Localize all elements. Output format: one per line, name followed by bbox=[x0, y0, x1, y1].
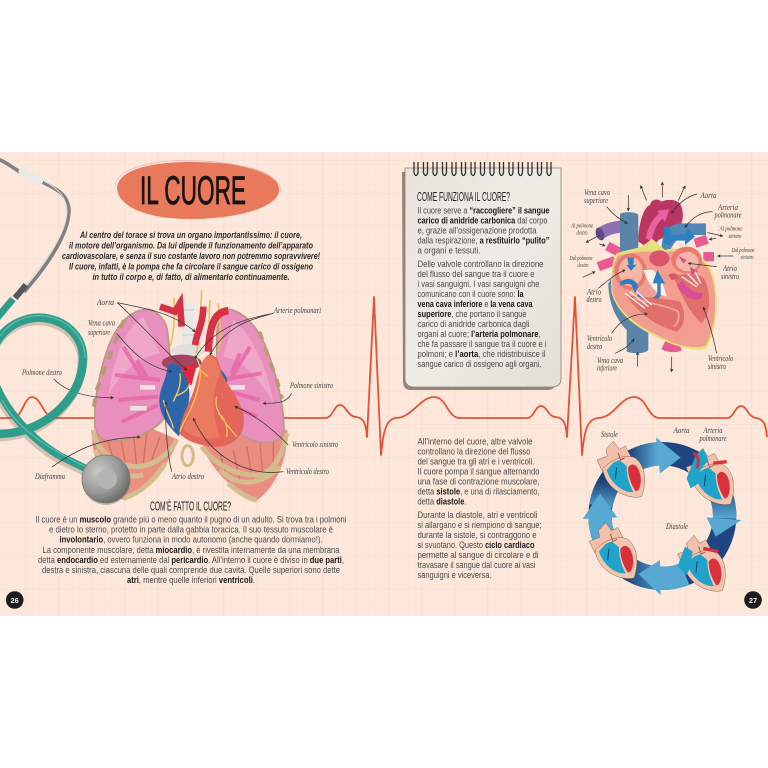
lung figure labels: superiore bbox=[88, 328, 110, 337]
heart cross-section labels bbox=[569, 188, 755, 372]
ring arc right bbox=[710, 476, 725, 518]
left lung bbox=[95, 309, 171, 441]
white connector bbox=[23, 172, 39, 180]
right diaphragm bbox=[202, 430, 287, 501]
body text left bbox=[36, 515, 346, 585]
heart cross-section labels: Dal polmone bbox=[569, 256, 593, 262]
notebook text: sangue carico di ossigeno agli organi. bbox=[418, 359, 542, 369]
intro text bbox=[62, 230, 320, 282]
pulmonary trunk bbox=[162, 355, 202, 371]
body text middle: durante la sistole, si contraggono e bbox=[418, 530, 536, 540]
left ventricle cavity bbox=[673, 274, 709, 323]
body text left: destra e sinistra, ciascuna delle quali comprende due cavità. Quelle superiori sono dette bbox=[42, 565, 340, 575]
mini heart top left bbox=[597, 441, 645, 497]
heart cross-section labels: Dal polmone bbox=[731, 248, 755, 254]
notebook text: organi al cuore; l’arteria polmonare, bbox=[418, 329, 540, 339]
chest piece bbox=[82, 455, 130, 505]
notebook text bbox=[418, 206, 550, 369]
lung figure labels: Ventricolo destro bbox=[286, 467, 329, 476]
center white and blue arrow bbox=[643, 270, 667, 297]
heart cross-section labels: sinistro bbox=[728, 234, 742, 240]
pulmonary artery blue bbox=[662, 223, 706, 253]
right valve cords bbox=[625, 292, 652, 308]
heart cross-section labels: sinistro bbox=[708, 362, 726, 371]
body text middle: detta diastole. bbox=[418, 496, 466, 506]
heart cross-section labels: inferiore bbox=[597, 364, 617, 372]
heart cross-section labels: Vena cava bbox=[584, 188, 610, 197]
notebook text: a organi e tessuti. bbox=[418, 246, 480, 256]
leaders bbox=[117, 303, 195, 332]
body text middle bbox=[418, 436, 542, 580]
page number 26 bbox=[6, 591, 24, 609]
notebook text: Il cuore serve a “raccogliere” il sangue bbox=[418, 206, 550, 216]
aortic root bbox=[182, 365, 197, 385]
page number 27: 27 bbox=[749, 596, 757, 605]
body text middle: detta sistole, e una di rilasciamento, bbox=[418, 486, 540, 496]
yellow fat layer bbox=[611, 238, 717, 350]
body text middle: travasare il sangue dal cuore ai vasi bbox=[418, 560, 536, 570]
mini heart bottom left bbox=[589, 523, 637, 579]
aorta arrow bbox=[646, 209, 669, 242]
right lung bbox=[217, 309, 284, 443]
body text middle: controllano la direzione del flusso bbox=[418, 446, 530, 456]
ring arc top bbox=[611, 454, 660, 480]
heart cross-section labels: Ventricolo bbox=[708, 354, 733, 363]
pulmonary arrow bbox=[663, 227, 695, 245]
heart cross-section labels: destro bbox=[578, 263, 588, 269]
notebook text: polmoni; e l’aorta, che ridistribuisce il bbox=[418, 349, 546, 359]
heart cross-section labels: Aorta bbox=[700, 191, 716, 200]
left atrium pink arrows bbox=[678, 256, 698, 275]
body text middle: Il cuore pompa il sangue alternando bbox=[418, 466, 540, 476]
green tubing to chest piece bbox=[0, 380, 97, 474]
body text middle: del sangue tra gli atri e i ventricoli. bbox=[418, 456, 534, 466]
pink pulmonary veins bbox=[598, 239, 714, 348]
cycle labels: Diastole bbox=[665, 522, 688, 531]
spiral rings bbox=[414, 162, 551, 176]
trachea bbox=[170, 303, 206, 353]
sternum tip bbox=[182, 446, 193, 466]
notebook shadow bbox=[402, 172, 556, 390]
right heart blue bbox=[159, 364, 189, 437]
notebook text: Delle valvole controllano la direzione bbox=[418, 259, 544, 269]
notebook text: dalla respirazione, a restituirlo “pulito” bbox=[418, 236, 550, 246]
lung figure labels: Polmone destro bbox=[21, 368, 62, 377]
bronchi left bbox=[115, 347, 160, 422]
notebook text: che fa passare il sangue tra il cuore e i bbox=[418, 339, 546, 349]
notebook text: carico di anidride carbonica dagli bbox=[418, 319, 530, 329]
green tubing loop bbox=[0, 318, 83, 434]
body text left: detta endocardio ed esternamente dal pericardio. All’interno il cuore è diviso in due parti, bbox=[38, 555, 344, 565]
flow arrows bbox=[627, 195, 629, 211]
lung white vessels bbox=[130, 387, 245, 408]
aortic valve bbox=[649, 250, 669, 266]
lung figure labels: Arterie polmonari bbox=[273, 306, 321, 315]
heart cross-section labels: Ventricolo bbox=[587, 334, 612, 343]
cycle labels: Sistole bbox=[601, 430, 618, 439]
heart cross-section labels: Atrio bbox=[722, 264, 737, 273]
green stub bbox=[0, 299, 13, 318]
body text left: Il cuore è un muscolo grande più o meno quanto il pugno di un adulto. Si trova tra i polmoni bbox=[36, 515, 346, 525]
nerves and vessels top bbox=[170, 290, 220, 353]
body text left: involontario, ovvero funziona in modo autonomo (anche quando dormiamo!). bbox=[60, 535, 322, 545]
coronary vessels bbox=[163, 358, 237, 437]
notebook text: carico di anidride carbonica dal corpo bbox=[418, 216, 548, 226]
notebook text: comunicano con il cuore sono: la bbox=[418, 289, 524, 299]
body text middle: sanguigni e viceversa. bbox=[418, 570, 492, 580]
body text middle: si svuotano. Questo ciclo cardiaco bbox=[418, 540, 535, 550]
heart cross-section labels: Al polmone bbox=[719, 226, 743, 232]
page number 26: 26 bbox=[11, 596, 19, 605]
cycle labels: Aorta bbox=[673, 426, 690, 435]
body text left: e dietro lo sterno, protetto in parte dalla gabbia toracica. Il suo tessuto muscolare è bbox=[49, 525, 333, 535]
page number 27 bbox=[744, 591, 762, 609]
body text left: La componente muscolare, detta miocardio, è rivestita internamente da una membrana bbox=[42, 545, 340, 555]
notebook text: i vasi sanguigni. I vasi sanguigni che bbox=[418, 279, 540, 289]
pulmonary veins blue bbox=[214, 367, 227, 386]
arrow left bbox=[583, 493, 617, 519]
title bbox=[115, 160, 281, 219]
ring arc bottom right of arrow bbox=[659, 574, 685, 578]
right ventricle cavity bbox=[626, 295, 684, 332]
body text middle: Durante la diastole, atri e ventricoli bbox=[418, 510, 538, 520]
vena cava bbox=[608, 212, 648, 353]
subheading: come è fatto: COM’È FATTO IL CUORE? bbox=[150, 499, 231, 514]
gray tube bbox=[0, 159, 69, 292]
rib dots bbox=[93, 322, 282, 410]
heart wall bbox=[612, 251, 715, 347]
lung figure labels: Atrio destro bbox=[171, 472, 204, 481]
dark connector bbox=[15, 285, 26, 298]
notebook text: del flusso del sangue tra il cuore e bbox=[418, 269, 534, 279]
intro text: Il cuore, infatti, è la pompa che fa circolare il sangue carico di ossigeno bbox=[69, 262, 313, 272]
left valve cords bbox=[682, 272, 701, 287]
cardiac cycle diagram bbox=[583, 437, 742, 595]
ribs bbox=[93, 430, 287, 500]
diaphragm fibres bbox=[107, 432, 273, 483]
notebook text: e, grazie all’ossigenazione prodotta bbox=[418, 226, 536, 236]
arrow bottom bbox=[638, 560, 661, 595]
body text middle: All’interno del cuore, altre valvole bbox=[418, 436, 532, 446]
body text left: atri, mentre quelle inferiori ventricoli. bbox=[127, 575, 255, 585]
leaders bbox=[607, 207, 627, 223]
arrow right bbox=[707, 517, 742, 537]
heart cross-section labels: polmonare bbox=[714, 210, 742, 220]
ECG trace bbox=[0, 297, 767, 455]
stethoscope bbox=[0, 159, 130, 505]
title text: IL CUORE bbox=[140, 169, 246, 213]
cycle labels: Arteria bbox=[703, 426, 722, 435]
lung highlights bbox=[108, 317, 273, 403]
heart cross-section labels: Vena cava bbox=[597, 356, 623, 365]
notebook panel bbox=[402, 162, 561, 390]
left diaphragm bbox=[92, 423, 178, 500]
right atrium arrows bbox=[620, 257, 638, 293]
purple pulmonary artery bbox=[601, 227, 623, 233]
heart cross-section labels: Al polmone bbox=[570, 224, 593, 230]
left atrium bbox=[671, 247, 702, 273]
lung figure labels: Ventricolo sinistro bbox=[292, 440, 338, 449]
lung figure labels: Polmone sinistro bbox=[289, 381, 333, 390]
page background with graph paper bbox=[0, 152, 768, 616]
body text middle: permette al sangue di circolare e di bbox=[418, 550, 538, 560]
heart cross-section labels: Atrio bbox=[586, 288, 601, 296]
notebook text: vena cava inferiore e la vena cava bbox=[418, 299, 533, 309]
ring arc left above arrow bbox=[601, 477, 613, 506]
body text middle: una fase di contrazione muscolare, bbox=[418, 476, 540, 486]
aorta bbox=[638, 199, 683, 250]
lung figure labels: Aorta bbox=[96, 298, 114, 307]
diaphragm leader bbox=[52, 437, 140, 467]
title blob bbox=[117, 162, 279, 219]
heart cross-section labels: sinistro bbox=[740, 255, 754, 261]
heart cross-section labels: destro bbox=[587, 342, 602, 351]
lung figure labels: Diaframma bbox=[34, 472, 65, 481]
heart cross-section bbox=[583, 182, 733, 372]
mini heart bottom right bbox=[677, 535, 725, 591]
heart cross-section labels: sinistro bbox=[721, 272, 739, 281]
ring arc left below arrow bbox=[600, 517, 608, 547]
intro text: cardiovascolare, e senza il suo costante lavoro non potremmo sopravvivere! bbox=[62, 251, 320, 261]
tube shadow bbox=[0, 321, 96, 477]
ring arc bottom left of arrow bbox=[622, 563, 660, 578]
heart cross-section labels: Arteria bbox=[717, 203, 738, 212]
heart cross-section labels: destro bbox=[586, 295, 602, 304]
arrow top bbox=[656, 437, 681, 473]
intro text: in tutto il corpo e, di fatto, di alimentarlo continuamente. bbox=[92, 272, 290, 282]
body text middle: si allargano e si riempiono di sangue; bbox=[418, 520, 542, 530]
heart cross-section labels: destro bbox=[576, 230, 588, 236]
notebook page bbox=[405, 168, 561, 387]
intro text: Al centro del torace si trova un organo importantissimo: il cuore, bbox=[79, 230, 302, 240]
left heart red bbox=[179, 355, 244, 447]
base ring bbox=[600, 454, 725, 578]
mini heart top right bbox=[686, 448, 734, 505]
cycle labels: polmonare bbox=[699, 434, 727, 443]
bronchi right bbox=[220, 347, 262, 417]
lungs and heart illustration bbox=[54, 290, 292, 501]
right atrium bbox=[615, 253, 647, 290]
intro text: il motore dell’organismo. Da lui dipende il funzionamento dell’apparato bbox=[69, 241, 313, 251]
lung figure labels bbox=[21, 298, 338, 481]
lung figure labels: Vena cava bbox=[88, 318, 115, 328]
notebook text: superiore, che portano il sangue bbox=[418, 309, 526, 319]
cycle labels bbox=[601, 426, 727, 531]
heart cross-section labels: superiore bbox=[584, 196, 608, 205]
notebook heading: COME FUNZIONA IL CUORE? bbox=[417, 190, 510, 204]
